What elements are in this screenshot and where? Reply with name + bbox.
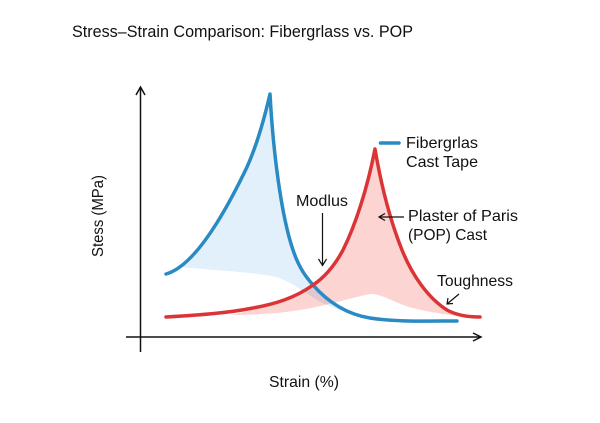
y axis label: Stess (MPa) [90,175,107,257]
y axis [136,87,145,352]
arrow: plaster of paris [379,214,404,220]
label: fiberglass cast tape: Fibergrlas [406,135,478,152]
arrow: modulus [318,213,326,266]
red area: plaster toughness [230,149,458,316]
label: modulus: Modlus [296,193,348,210]
label: toughness: Toughness [437,273,513,290]
title: Stress–Strain Comparison: Fibergrlass vs. POP [72,23,413,41]
x axis label: Strain (%) [269,374,339,391]
blue area: fiberglass toughness [180,94,372,320]
label: fiberglass cast tape: Cast Tape [406,154,478,171]
label: plaster of paris cast: (POP) Cast [408,227,488,244]
x axis [126,333,481,341]
arrow: toughness [447,294,459,304]
label: plaster of paris cast: Plaster of Paris [408,208,518,225]
legend key: fiberglass [380,141,399,145]
red curve: plaster of paris cast [166,149,480,317]
blue curve: fiberglass cast tape [166,94,457,321]
